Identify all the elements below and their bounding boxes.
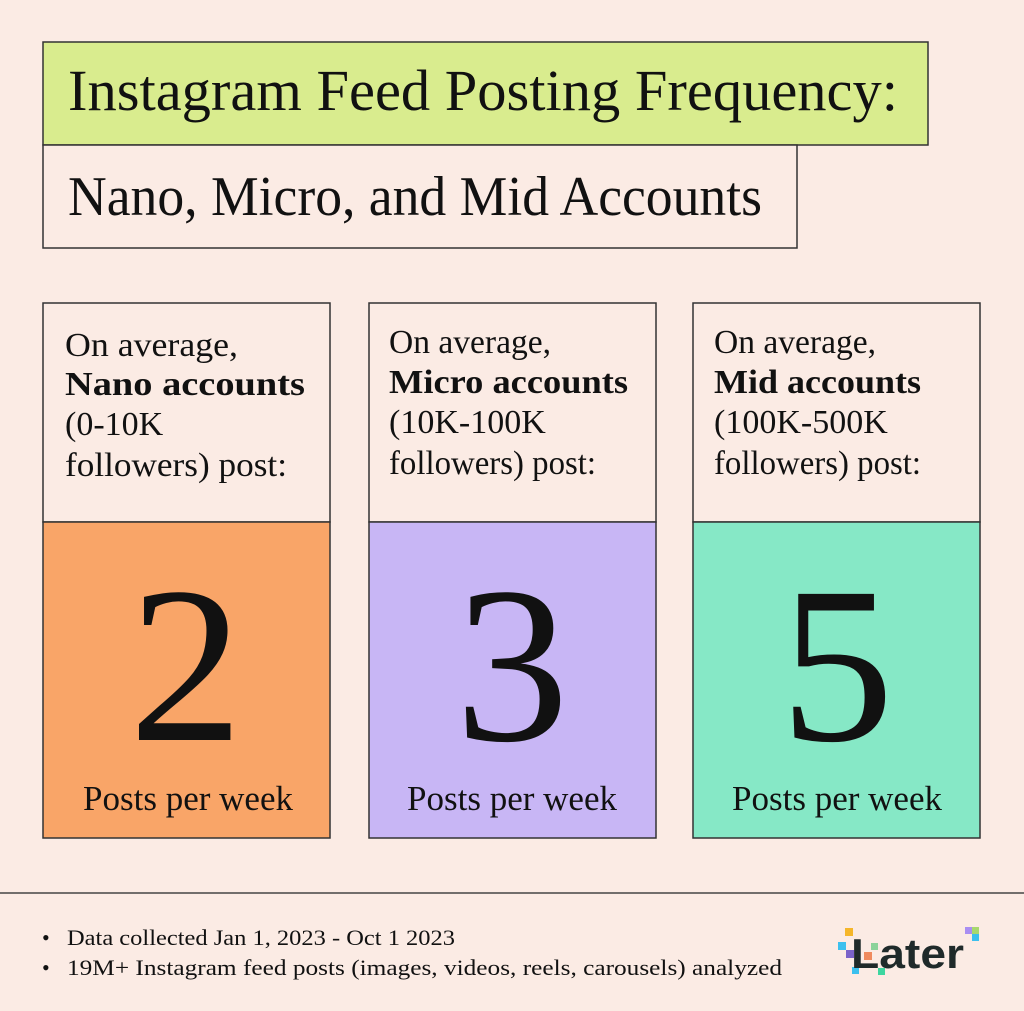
panel: mid: 5 [780,541,894,788]
panel: micro: On average, [389,324,551,361]
panel: micro: (10K-100K [389,404,546,441]
panel: mid [693,303,980,838]
panel: nano: (0-10K [65,406,164,443]
title [43,42,928,145]
panel: micro: Posts per week [407,779,617,818]
panel: mid: Mid accounts [714,364,921,401]
panel: nano: followers) post: [65,447,287,484]
panel: micro: 3 [455,541,569,788]
panel: nano: On average, [65,327,238,364]
footer notes [42,925,782,980]
logo: Later: Later [851,930,964,977]
panel: mid: followers) post: [714,445,921,482]
panel: nano: 2 [129,541,243,788]
panel: nano: Nano accounts [65,366,305,403]
footer notes: • [42,955,50,980]
footer notes: Data collected Jan 1, 2023 - Oct 1 2023 [67,925,455,950]
footer notes: • [42,925,50,950]
panel: micro: followers) post: [389,445,596,482]
panel: mid: On average, [714,324,876,361]
panel: nano: Posts per week [83,779,293,818]
panel: nano [43,303,330,838]
title: Instagram Feed Posting Frequency: [68,58,898,123]
logo: Later [838,927,979,977]
subtitle: Nano, Micro, and Mid Accounts [68,166,762,228]
subtitle [43,145,797,248]
panel: mid: Posts per week [732,779,942,818]
panel: micro [369,303,656,838]
footer notes: 19M+ Instagram feed posts (images, videos, reels, carousels) analyzed [67,955,782,980]
panel: micro: Micro accounts [389,364,628,401]
panel: mid: (100K-500K [714,404,888,441]
